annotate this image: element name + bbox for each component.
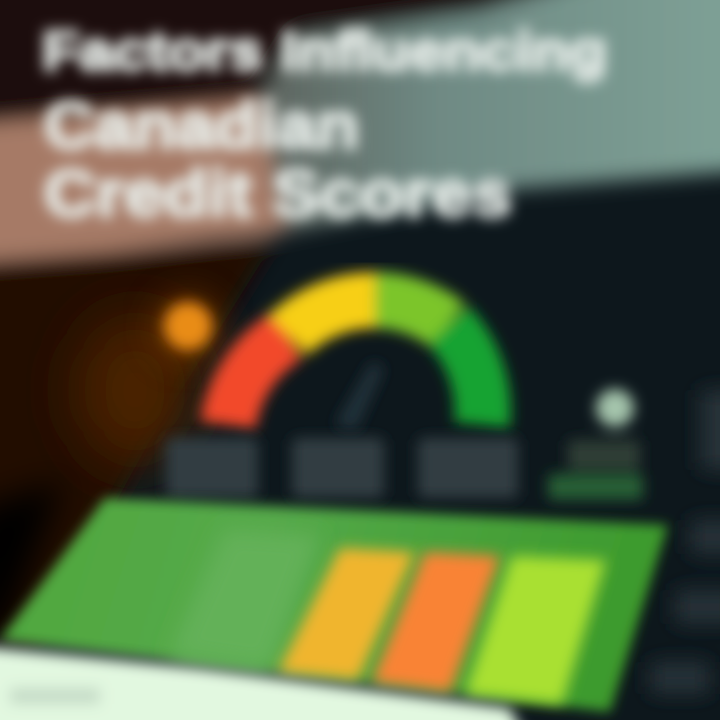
title text: Factors Influencing <box>42 19 607 82</box>
gauge needle <box>335 362 384 430</box>
orange segment <box>372 552 500 692</box>
background: brown glow <box>75 315 195 465</box>
background: black corner <box>0 480 65 650</box>
icon: check mark with label <box>548 389 643 500</box>
gauge chart <box>228 300 483 425</box>
side labels <box>650 390 720 694</box>
title text <box>42 19 607 230</box>
panel: pale lower strip <box>0 645 530 720</box>
title text: Canadian <box>44 88 359 162</box>
title text: Credit Scores <box>44 156 512 230</box>
lime segment <box>465 556 606 704</box>
yellow segment <box>278 548 415 680</box>
lighter green segment <box>170 530 320 670</box>
panel: green score bar <box>0 498 668 712</box>
gauge labels <box>166 438 518 498</box>
icon: orange glowing dot <box>152 292 224 364</box>
